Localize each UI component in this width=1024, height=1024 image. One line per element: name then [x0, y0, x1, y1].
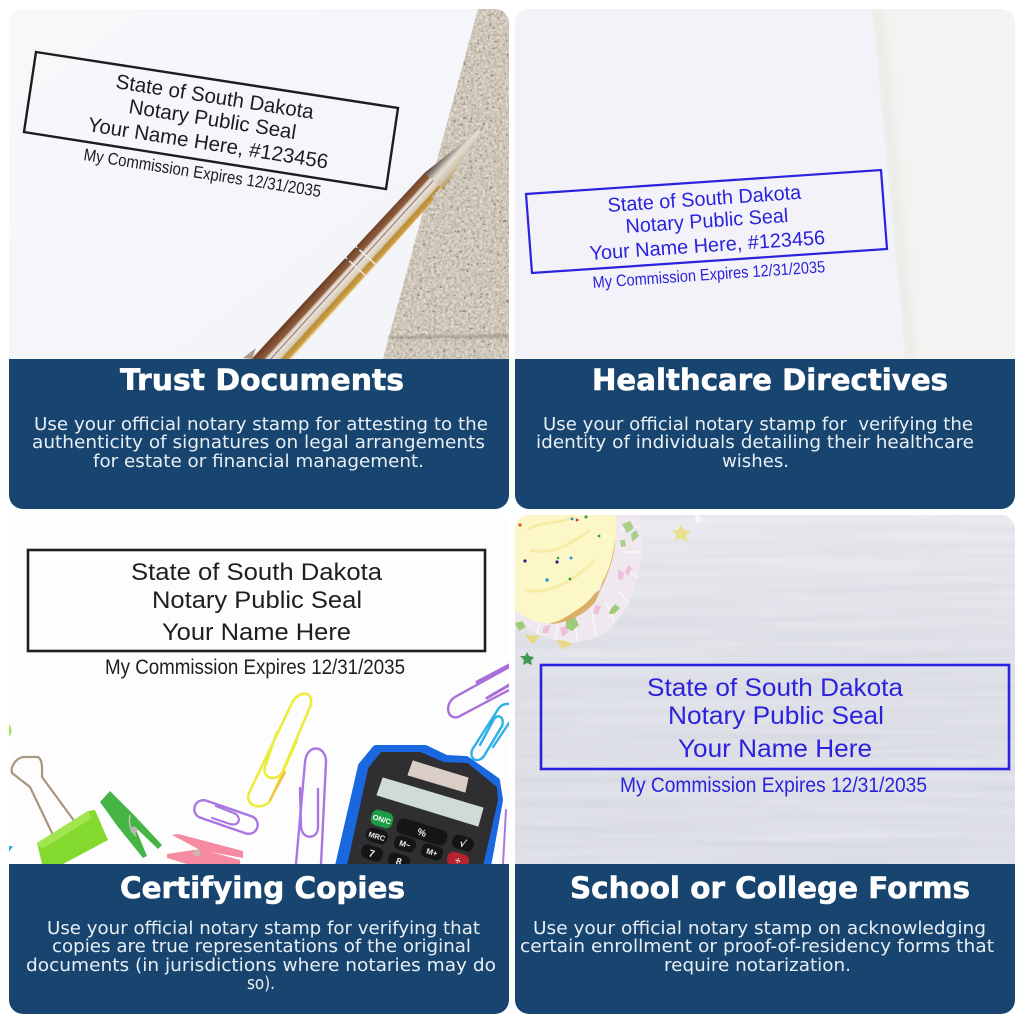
- body text: Use your official notary stamp on acknowledging: [533, 919, 986, 939]
- body text: Use your official notary stamp for attesting to the: [34, 415, 488, 435]
- photo: cupcake on pale wood: [515, 515, 1015, 865]
- body text: require notarization.: [664, 956, 851, 976]
- stamp impression: black: [24, 52, 398, 201]
- icon: green clothespin: [100, 791, 162, 858]
- icon: pen: [252, 125, 485, 359]
- body text: [520, 919, 994, 976]
- stamp impression: black rectangular: My Commission Expires 12/31/2035: [105, 656, 405, 679]
- icon: calculator: 8: [394, 856, 403, 869]
- body text: [32, 415, 488, 472]
- heading: Healthcare Directives: [592, 363, 948, 397]
- stamp impression: blue: State of South Dakota: [607, 182, 803, 217]
- body text: Use your official notary stamp for verifying that: [47, 919, 480, 939]
- heading: School or College Forms: [570, 871, 970, 905]
- panel: certifying copies: [9, 515, 511, 1014]
- icon: calculator: √: [458, 837, 468, 851]
- body text: [26, 919, 496, 994]
- body text: so).: [247, 974, 275, 994]
- heading: Trust Documents: [120, 363, 404, 397]
- caption bar: [515, 864, 1015, 1014]
- body text: Use your official notary stamp for verifying the: [543, 415, 973, 435]
- panel: school or college forms: [515, 515, 1015, 1014]
- body text: copies are true representations of the original: [52, 937, 471, 957]
- heading: Certifying Copies: [120, 871, 405, 905]
- stamp impression: blue: [526, 170, 887, 292]
- icon: calculator: M−: [398, 839, 412, 851]
- icon: calculator: M+: [425, 847, 439, 859]
- icon: calculator: 7: [367, 848, 376, 861]
- icon: binder clip: [12, 757, 108, 864]
- panel: healthcare directives: [515, 9, 1015, 509]
- stamp impression: blue rectangular: My Commission Expires 12/31/2035: [620, 773, 927, 797]
- stamp impression: black: State of South Dakota: [114, 70, 316, 124]
- icon: paper clips: [192, 664, 511, 864]
- icon: calculator: MRC: [367, 830, 387, 843]
- stamp impression: black: My Commission Expires 12/31/2035: [82, 145, 322, 201]
- body text: identity of individuals detailing their healthcare: [536, 433, 974, 453]
- icon: calculator: ON/C: [372, 812, 393, 827]
- photo: office supplies on white desk: [9, 548, 509, 864]
- stamp impression: blue: My Commission Expires 12/31/2035: [592, 258, 826, 292]
- caption bar: [9, 359, 509, 509]
- icon: pink clothespin: [167, 834, 243, 865]
- stamp impression: blue rectangular: Notary Public Seal: [668, 702, 884, 730]
- body text: [536, 415, 974, 472]
- icon: star confetti: [520, 515, 702, 665]
- stamp impression: blue rectangular: [541, 665, 1009, 797]
- stamp impression: blue: Notary Public Seal: [625, 205, 789, 238]
- icon: cupcake: [515, 515, 642, 643]
- stamp impression: black rectangular: State of South Dakota: [131, 559, 382, 586]
- stamp impression: black rectangular: Your Name Here: [162, 619, 351, 646]
- icon: calculator: [339, 749, 499, 871]
- body text: wishes.: [722, 452, 789, 472]
- body text: authenticity of signatures on legal arrangements: [32, 433, 485, 453]
- body text: documents (in jurisdictions where notaries may do: [26, 956, 496, 976]
- icon: calculator: %: [416, 827, 428, 840]
- caption bar: [515, 359, 1015, 509]
- icon: pen clip end: [243, 348, 256, 359]
- caption bar: [9, 864, 509, 1014]
- stamp impression: blue rectangular: State of South Dakota: [647, 674, 903, 702]
- photo: stamped paper on white surface: [515, 9, 1015, 359]
- body text: certain enrollment or proof-of-residency forms that: [520, 937, 994, 957]
- icon: calculator: ÷: [453, 855, 462, 868]
- stamp impression: black rectangular: [28, 550, 485, 679]
- body text: for estate or financial management.: [93, 452, 424, 472]
- photo: stamped paper with pen on sand: [9, 9, 509, 383]
- stamp impression: black: Your Name Here, #123456: [86, 113, 330, 174]
- stamp impression: blue rectangular: Your Name Here: [678, 735, 872, 763]
- stamp impression: blue: Your Name Here, #123456: [589, 227, 826, 265]
- stamp impression: black: Notary Public Seal: [127, 95, 298, 144]
- panel: trust documents: [9, 9, 509, 509]
- stamp impression: black rectangular: Notary Public Seal: [152, 587, 362, 614]
